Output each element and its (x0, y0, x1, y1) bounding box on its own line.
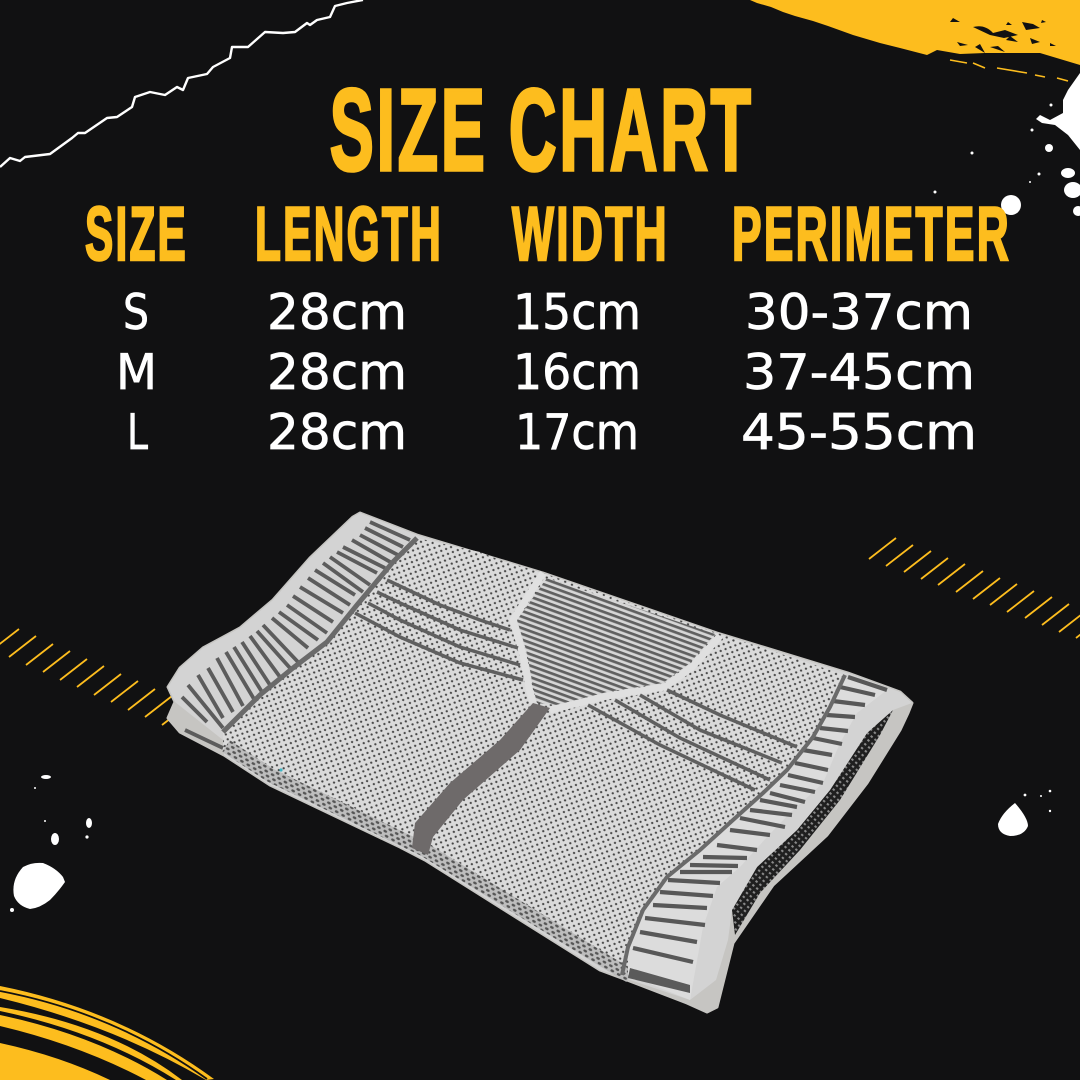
yellow brush stroke top right (750, 0, 1080, 81)
table row M (116, 344, 975, 401)
right cuff bottom fold (628, 968, 690, 993)
white torn paper line (0, 0, 363, 167)
table row M: 16cm (513, 344, 641, 401)
white paint splash top right (934, 73, 1080, 216)
inner dark knit (732, 710, 893, 935)
product: knee sleeve (168, 513, 912, 1012)
white splatter right (998, 790, 1051, 836)
knit panel (223, 538, 845, 978)
lower right stripes (588, 690, 797, 790)
table headers: LENGTH (255, 192, 443, 277)
table row S (123, 284, 973, 341)
table headers: WIDTH (512, 192, 669, 277)
table row L: L (127, 404, 149, 461)
lower layer silhouette (168, 513, 912, 1012)
table row S: S (123, 284, 149, 341)
table headers: SIZE (85, 192, 188, 277)
center knee stripe patch (517, 578, 715, 705)
title: SIZE CHART (330, 65, 754, 195)
table row M: 37-45cm (743, 344, 975, 401)
yellow brush stroke bottom left (0, 986, 214, 1080)
yellow hatch marks right (869, 538, 1080, 638)
table row L (127, 404, 977, 461)
right cuff base (628, 677, 887, 1000)
right cuff stripes (633, 677, 887, 962)
table row S: 15cm (513, 284, 641, 341)
left cuff stripes (182, 522, 410, 748)
table row L: 45-55cm (741, 404, 977, 461)
table row M: M (116, 344, 157, 401)
right cuff dark line (622, 675, 845, 975)
table row L: 28cm (267, 404, 407, 461)
upper layer fabric (168, 513, 912, 1000)
white splatter left (10, 775, 92, 912)
table headers (85, 192, 1011, 277)
table row S: 30-37cm (745, 284, 973, 341)
table row S: 28cm (267, 284, 407, 341)
table row L: 17cm (515, 404, 639, 461)
dotted lower edge band (226, 746, 630, 976)
yellow hatch marks left (0, 629, 189, 725)
upper left stripes (355, 580, 523, 680)
light band around patch (513, 573, 720, 710)
left cuff dark line (223, 538, 417, 732)
table row M: 28cm (267, 344, 407, 401)
blue speck (279, 768, 283, 772)
center dark band (412, 703, 550, 855)
